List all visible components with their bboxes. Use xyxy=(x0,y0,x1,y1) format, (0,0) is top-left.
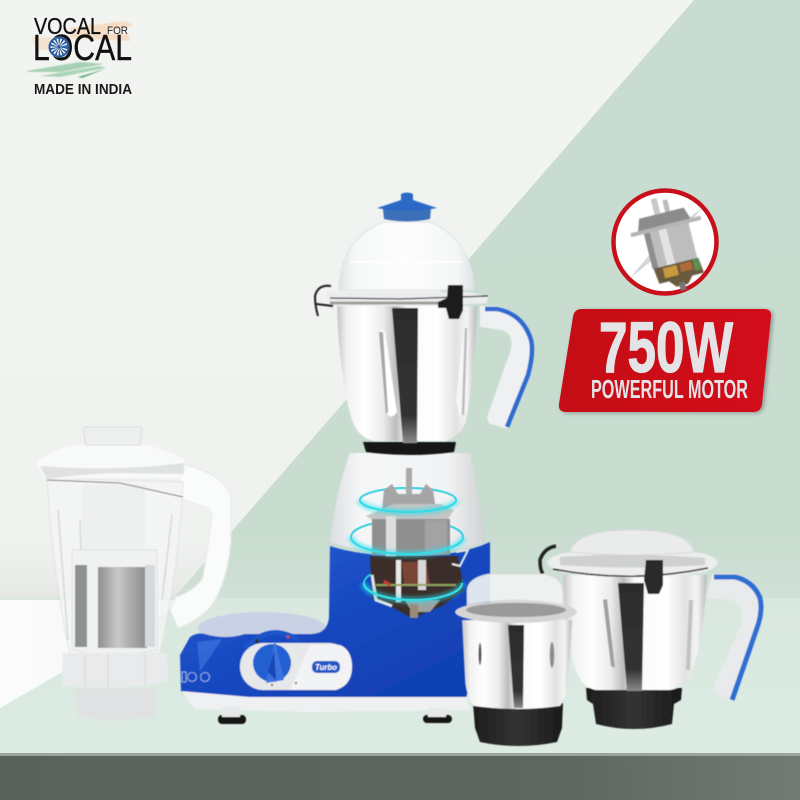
logo: vocal for local xyxy=(26,13,134,98)
lid neck blue xyxy=(383,209,431,222)
dial marks xyxy=(255,636,297,686)
ring fronts xyxy=(351,500,463,600)
handle xyxy=(480,306,534,429)
white plinth xyxy=(181,686,470,712)
loop latch xyxy=(540,546,556,574)
brand logo: Turbo xyxy=(315,662,337,672)
lid xyxy=(37,445,185,479)
mixer base unit xyxy=(180,453,490,724)
icon: chakra xyxy=(48,36,70,58)
handle blue grip xyxy=(714,577,761,700)
loop latch xyxy=(315,286,333,316)
medium steel jar xyxy=(540,530,764,729)
main steel jar (top) xyxy=(315,192,534,455)
dark stripe xyxy=(508,625,524,708)
side reflections xyxy=(603,599,615,668)
dial knob xyxy=(253,644,291,682)
platform xyxy=(198,612,326,644)
ring backs xyxy=(351,488,463,583)
lid top xyxy=(570,530,694,555)
steel body xyxy=(462,620,572,709)
lid cap xyxy=(83,427,142,445)
exposed motor with cyan rings xyxy=(351,468,468,618)
clip xyxy=(438,285,463,319)
dark stripe xyxy=(618,583,644,691)
lid flange xyxy=(547,550,718,578)
rim xyxy=(327,292,488,306)
black drive ring xyxy=(363,442,456,455)
upper white housing xyxy=(330,453,486,552)
icon: motor xyxy=(624,189,717,299)
handle xyxy=(170,463,231,628)
motor body xyxy=(366,468,468,618)
badge shape xyxy=(559,309,771,412)
dark stripe xyxy=(392,308,418,443)
side slots xyxy=(379,330,397,417)
foot xyxy=(74,689,157,720)
logo text: made in india: MADE IN INDIA xyxy=(34,82,132,98)
steel body xyxy=(563,575,707,690)
clip xyxy=(644,560,663,594)
inner cylinder xyxy=(82,485,145,552)
flag streaks xyxy=(26,21,134,78)
rim xyxy=(455,601,577,623)
handle xyxy=(706,574,764,702)
blue housing xyxy=(180,542,490,697)
black base xyxy=(473,703,563,746)
logo text: for: FOR xyxy=(107,25,128,37)
motor icon badge xyxy=(614,189,717,299)
side reflections xyxy=(478,643,482,665)
strainer xyxy=(72,550,157,654)
blender jar (left) xyxy=(37,427,231,720)
certification marks xyxy=(182,672,210,682)
red power badge xyxy=(559,309,771,412)
ring glow xyxy=(351,500,463,600)
handle blue grip xyxy=(485,309,532,427)
dome xyxy=(339,222,474,290)
control panel xyxy=(240,643,352,690)
lid knob xyxy=(377,192,437,211)
black base xyxy=(586,688,682,729)
body xyxy=(47,478,183,655)
dial ring xyxy=(245,633,298,648)
steel body xyxy=(337,306,477,441)
lid dome xyxy=(467,574,563,605)
wattage: 750W xyxy=(599,309,733,388)
small steel jar xyxy=(455,574,577,746)
feet xyxy=(218,715,246,724)
logo text: local: LOCAL xyxy=(33,27,132,68)
logo text: vocal: VOCAL xyxy=(34,13,101,39)
collar xyxy=(62,653,168,688)
